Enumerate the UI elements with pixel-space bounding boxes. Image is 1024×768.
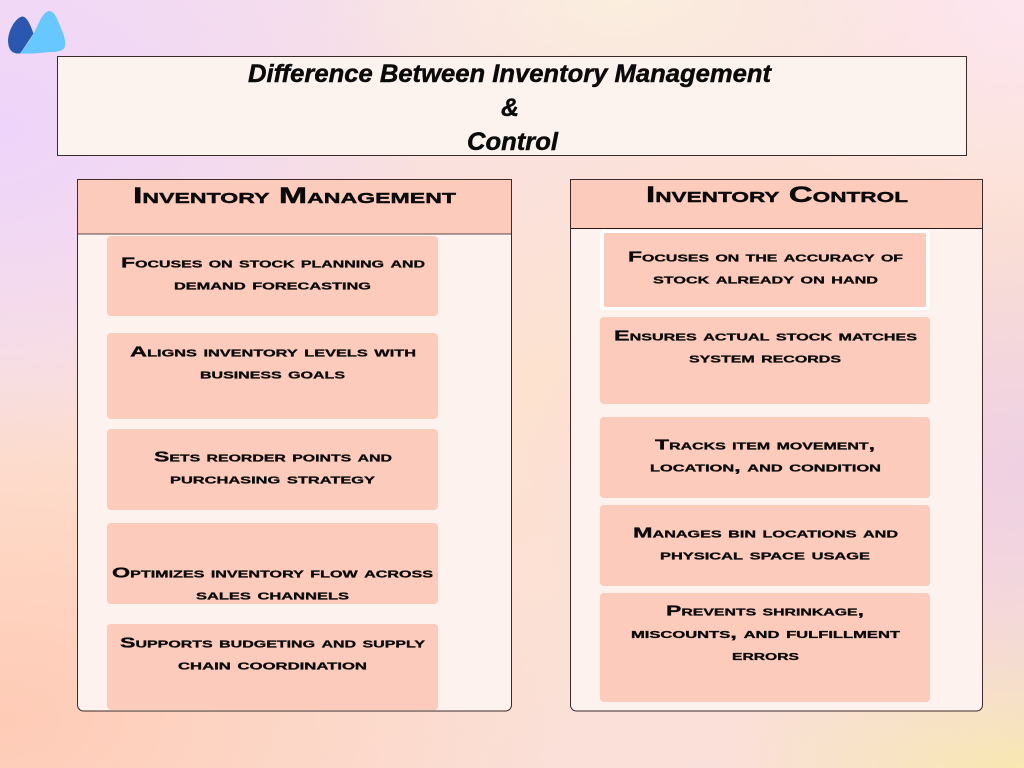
card: bin locations: [600, 505, 930, 586]
card: inventory flow: [107, 523, 438, 604]
card: system records: Ensures actual stock matches: [614, 328, 918, 344]
heading: inventory control: [571, 180, 982, 228]
panel: inventory management: [78, 180, 512, 711]
panel: inventory control: [570, 180, 982, 711]
heading: inventory management: Inventory Management: [133, 183, 456, 208]
card: bin locations: Manages bin locations and: [633, 526, 898, 542]
title: Control: [467, 128, 559, 156]
card: stock planning: demand forecasting: [174, 278, 371, 294]
icon: logo: [8, 11, 65, 54]
card: system records: system records: [689, 350, 842, 366]
card: stock accuracy: stock already on hand: [653, 272, 878, 288]
title: &: [501, 94, 519, 122]
card: budgeting: chain coordination: [178, 658, 367, 674]
card: system records: [600, 317, 930, 404]
heading: inventory management: [78, 180, 511, 234]
card: budgeting: Supports budgeting and supply: [120, 636, 426, 652]
card: business goals: [107, 333, 438, 419]
card: stock accuracy: [600, 230, 930, 310]
card: bin locations: physical space usage: [660, 548, 871, 564]
card: stock planning: [107, 236, 438, 316]
card: stock planning: Focuses on stock planning and: [121, 256, 425, 272]
card: inventory flow: sales channels: [196, 588, 350, 604]
card: shrinkage: Prevents shrinkage,: [666, 604, 864, 620]
title: Difference Between Inventory Management: [248, 60, 773, 88]
card: stock accuracy: Focuses on the accuracy of: [628, 250, 903, 266]
card: shrinkage: miscounts, and fulfillment: [631, 626, 900, 642]
heading: inventory control: Inventory Control: [646, 182, 908, 207]
card: business goals: business goals: [200, 366, 346, 382]
card: reorder points: purchasing strategy: [170, 472, 376, 488]
title: [58, 56, 966, 156]
card: item movement: Tracks item movement,: [655, 438, 875, 454]
card: shrinkage: [600, 593, 930, 702]
card: inventory flow: Optimizes inventory flow across: [112, 566, 434, 582]
card: reorder points: [107, 429, 438, 510]
card: reorder points: Sets reorder points and: [154, 450, 392, 466]
card: shrinkage: errors: [732, 648, 799, 664]
card: item movement: [600, 417, 930, 498]
card: item movement: location, and condition: [650, 460, 881, 476]
card: budgeting: [107, 624, 438, 710]
card: business goals: Aligns inventory levels with: [130, 344, 416, 360]
